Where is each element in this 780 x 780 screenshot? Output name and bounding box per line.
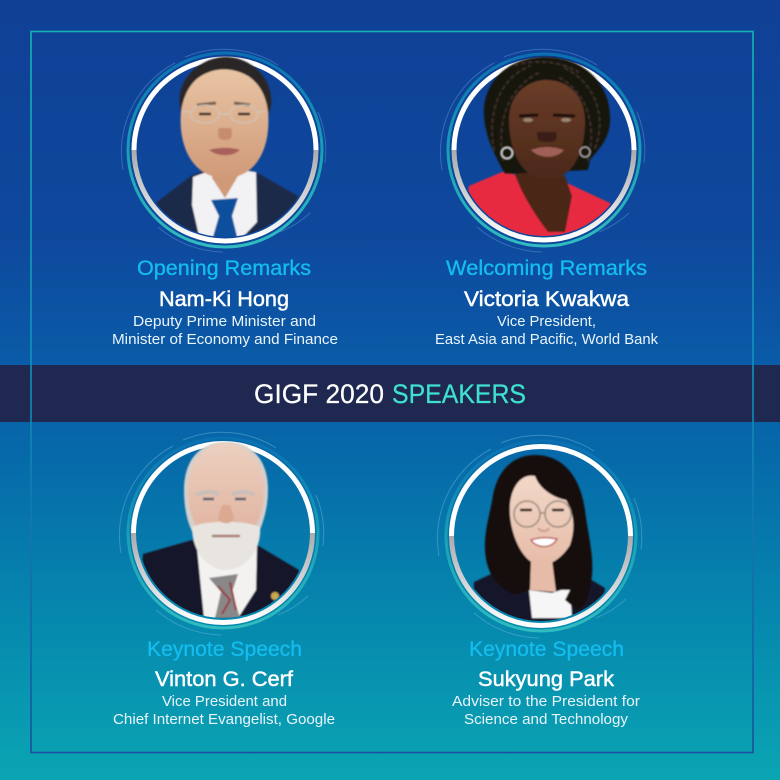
title: Victoria Kwakwa: East Asia and Pacific, World Bank [435,332,659,348]
banner title: SPEAKERS [392,379,526,409]
heading: Welcoming Remarks: Welcoming Remarks [446,257,647,280]
title: Nam-Ki Hong [112,314,338,348]
title: Vinton G. Cerf [113,694,335,728]
title: Nam-Ki Hong: Minister of Economy and Finance [112,332,338,348]
name: Victoria Kwakwa: Victoria Kwakwa [464,287,629,311]
name: Nam-Ki Hong: Nam-Ki Hong [159,287,289,311]
title: Victoria Kwakwa [435,314,659,348]
speaker card: Vinton G. Cerf [113,432,335,728]
portrait ring [119,432,324,635]
banner band [0,365,780,422]
title: Vinton G. Cerf: Chief Internet Evangelist, Google [113,712,335,728]
portrait ring [437,435,642,638]
title: Sukyung Park [452,694,640,728]
heading: Keynote Speech: Keynote Speech [147,638,302,661]
title: Nam-Ki Hong: Deputy Prime Minister and [133,314,316,330]
portrait ring [121,49,326,252]
title: Sukyung Park: Adviser to the President for [452,694,640,710]
heading: Opening Remarks: Opening Remarks [137,257,311,280]
portrait: Nam-Ki Hong [156,56,298,236]
portrait: Sukyung Park [472,454,606,621]
speaker card: Victoria Kwakwa [435,49,659,348]
name: Sukyung Park: Sukyung Park [478,667,614,691]
banner title [254,379,526,409]
speaker card: Nam-Ki Hong [112,49,338,348]
banner title: GIGF 2020 [254,379,384,409]
name: Vinton G. Cerf: Vinton G. Cerf [155,667,293,691]
title: Vinton G. Cerf: Vice President and [162,694,287,710]
heading: Keynote Speech: Keynote Speech [469,638,624,661]
title: Victoria Kwakwa: Vice President, [497,314,596,330]
portrait ring [440,49,645,252]
speaker card: Sukyung Park [437,435,642,728]
portrait: Victoria Kwakwa [468,56,612,236]
title: Sukyung Park: Science and Technology [464,712,629,728]
portrait: Vinton G. Cerf [142,441,300,618]
